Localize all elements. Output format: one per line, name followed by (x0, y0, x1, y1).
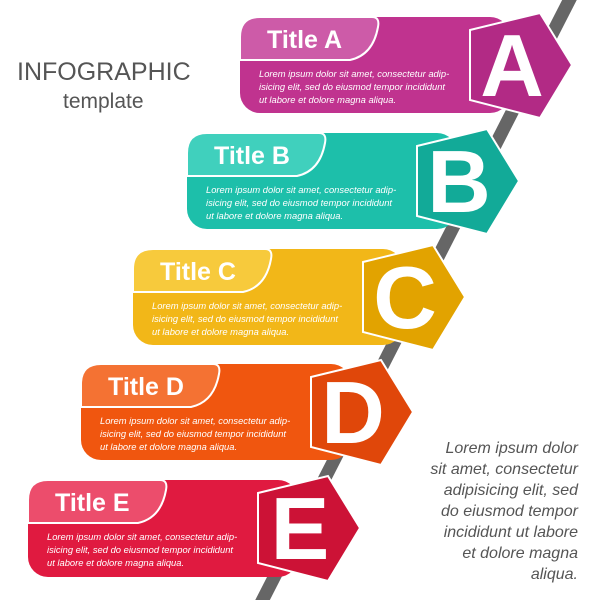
panel: C: C (373, 248, 437, 347)
side paragraph: adipisicing elit, sed (444, 482, 579, 499)
panel: C: Lorem ipsum dolor sit amet, consectetur adip- (152, 300, 342, 311)
panel: A: ut labore et dolore magna aliqua. (259, 94, 396, 105)
heading: INFOGRAPHIC template (17, 58, 191, 113)
panel: E: Title E (55, 489, 130, 517)
panel: A (240, 13, 572, 118)
diagonal line (260, 0, 572, 600)
panel: B: ut labore et dolore magna aliqua. (206, 210, 343, 221)
panel: A: isicing elit, sed do eiusmod tempor incididunt (259, 81, 445, 92)
panel: D (81, 360, 413, 465)
side paragraph: et dolore magna (462, 545, 578, 562)
panel: E: E (271, 479, 329, 578)
panel: E: Lorem ipsum dolor sit amet, consectetur adip- (47, 531, 237, 542)
panel: D: isicing elit, sed do eiusmod tempor incididunt (100, 428, 286, 439)
panel: E: isicing elit, sed do eiusmod tempor incididunt (47, 544, 233, 555)
panel: C: isicing elit, sed do eiusmod tempor incididunt (152, 313, 338, 324)
side paragraph: aliqua. (531, 566, 578, 583)
panel: B: Title B (214, 142, 290, 170)
panel: C (133, 245, 465, 350)
panel: B (187, 129, 519, 234)
panel: B: isicing elit, sed do eiusmod tempor incididunt (206, 197, 392, 208)
panel: E: ut labore et dolore magna aliqua. (47, 557, 184, 568)
heading: INFOGRAPHIC template: template (63, 90, 144, 113)
panel: A: A (480, 16, 544, 115)
panel: D: ut labore et dolore magna aliqua. (100, 441, 237, 452)
side paragraph (430, 440, 579, 583)
side paragraph: sit amet, consectetur (430, 461, 579, 478)
heading: INFOGRAPHIC template: INFOGRAPHIC (17, 58, 191, 86)
panel: C: Title C (160, 258, 236, 286)
panel: D: D (321, 363, 385, 462)
side paragraph: incididunt ut labore (444, 524, 578, 541)
side paragraph: do eiusmod tempor (441, 503, 579, 520)
panel: D: Lorem ipsum dolor sit amet, consectetur adip- (100, 415, 290, 426)
side paragraph: Lorem ipsum dolor (446, 440, 579, 457)
panel: C: ut labore et dolore magna aliqua. (152, 326, 289, 337)
panel: A: Title A (267, 26, 342, 54)
panel: E (28, 476, 360, 581)
panel: A: Lorem ipsum dolor sit amet, consectetur adip- (259, 68, 449, 79)
panel: D: Title D (108, 373, 184, 401)
panel: B: Lorem ipsum dolor sit amet, consectetur adip- (206, 184, 396, 195)
panel: B: B (427, 132, 491, 231)
